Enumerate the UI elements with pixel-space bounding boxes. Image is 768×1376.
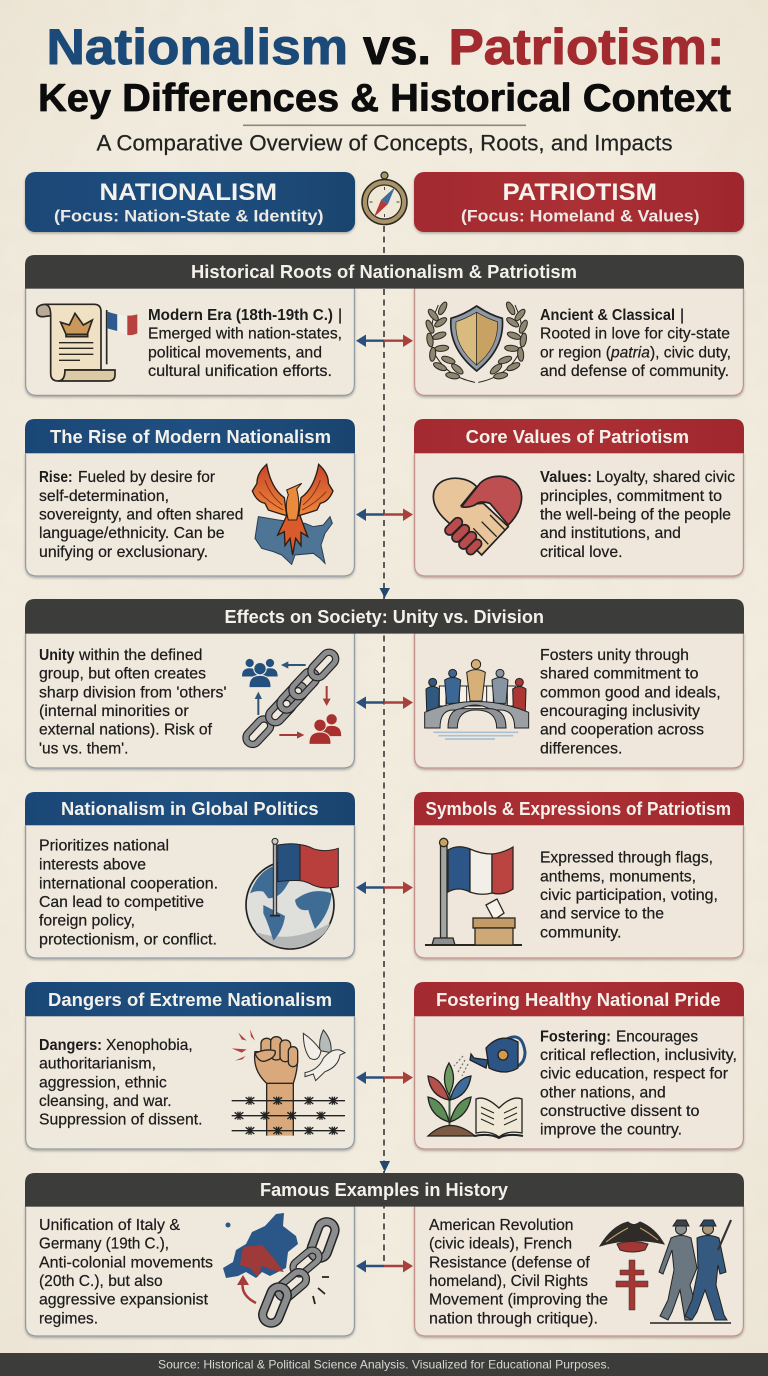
text: fosters unity: common good and ideals, (540, 684, 721, 701)
icon: scroll and flag (37, 304, 137, 381)
icon: handshake heart (433, 476, 522, 556)
column header: nationalism (25, 172, 355, 232)
text: unification examples: (20th C.), but also (39, 1273, 163, 1290)
icon: people on bridge (425, 660, 529, 739)
icon: globe and flag (246, 838, 338, 949)
banner: historical roots (25, 255, 744, 289)
text: ancient and classical: Ancient & Classical (540, 307, 675, 324)
text: modern era: political movements, and (148, 344, 322, 361)
arrow: rise vs values comparison (356, 508, 413, 521)
column header: nationalism: (Focus: Nation-State & Identity) (54, 206, 324, 226)
panel: symbols and expressions (414, 792, 744, 958)
heading: dangers: Dangers of Extreme Nationalism (48, 990, 332, 1010)
text: fostering: critical reflection, inclusivity, (540, 1047, 737, 1064)
text: rise: unifying or exclusionary. (39, 544, 208, 561)
banner: famous examples (25, 1173, 744, 1207)
column header: patriotism: (Focus: Homeland & Values) (461, 206, 700, 226)
icon: europe map and broken chain (223, 1213, 337, 1326)
text: unity: external nations). Risk of (39, 722, 213, 739)
arrow: down to famous examples (380, 1161, 390, 1172)
text: revolution examples: nation through critique). (429, 1310, 598, 1327)
text: fosters unity: shared commitment to (540, 666, 699, 683)
footer: Source: Historical & Political Science Analysis. Visualized for Educational Purposes. (158, 1358, 610, 1372)
text: values: the well-being of the people (540, 506, 731, 524)
panel: nationalism in global politics (25, 792, 355, 958)
section 3: effects on society (25, 599, 744, 768)
text: rise: Rise: (39, 469, 72, 486)
icon: chain and opposing groups (242, 649, 342, 747)
text: symbols: community. (540, 924, 622, 941)
text: values: Loyalty, shared civic (596, 469, 735, 486)
arrow: examples comparison (356, 1260, 413, 1272)
panel: modern era (26, 288, 354, 395)
title: Nationalism (46, 19, 348, 75)
heading: rise of modern nationalism (25, 419, 355, 453)
text: revolution examples: Resistance (defense of (429, 1254, 590, 1271)
heading: fostering (414, 982, 744, 1016)
icon: shield and laurel (424, 301, 529, 382)
icon: tricorn hat, cross of Lorraine and soldiers (600, 1220, 731, 1323)
arrow: dangers vs fostering comparison (356, 1072, 413, 1084)
icon: phoenix over map (252, 464, 333, 564)
footer (0, 1353, 768, 1376)
text: unification examples: Unification of Italy & (39, 1217, 180, 1234)
text: revolution examples: (civic ideals), French (429, 1236, 572, 1253)
text: dangers: Xenophobia, (106, 1037, 193, 1054)
text: dangers: Suppression of dissent. (39, 1112, 202, 1129)
heading: core values: Core Values of Patriotism (466, 427, 689, 447)
text: rise: sovereignty, and often shared (39, 506, 244, 524)
arrow: down to effects (380, 588, 390, 598)
column header: patriotism (414, 172, 744, 232)
banner: historical roots: Historical Roots of Nationalism & Patriotism (191, 262, 577, 282)
text: ancient and classical: and defense of community. (540, 363, 729, 380)
text: symbols (540, 850, 718, 941)
text: fostering: Fostering: (540, 1028, 611, 1045)
text: unification examples (39, 1217, 213, 1327)
icon: compass (362, 172, 407, 224)
heading: fostering: Fostering Healthy National Pride (436, 990, 721, 1010)
text: ancient and classical (540, 307, 731, 380)
arrow: effects comparison (356, 696, 413, 709)
text: unity: Unity (39, 647, 75, 664)
text: symbols: anthems, monuments, (540, 868, 696, 885)
text: dangers (39, 1037, 202, 1129)
heading: symbols: Symbols & Expressions of Patriotism (426, 799, 731, 819)
text: fostering: civic education, respect for (540, 1066, 729, 1083)
text: fosters unity: differences. (540, 740, 622, 757)
text: values: and institutions, and (540, 525, 681, 542)
text: revolution examples: American Revolution (429, 1217, 574, 1234)
text: revolution examples (429, 1217, 608, 1327)
text: dangers: cleansing, and war. (39, 1093, 172, 1110)
text: ancient and classical: Rooted in love for city-state (540, 326, 730, 343)
text: unification examples: regimes. (39, 1310, 98, 1327)
heading: rise of modern nationalism: The Rise of Modern Nationalism (50, 427, 331, 447)
banner: effects on society (25, 599, 744, 634)
text: values: Values: (540, 469, 592, 486)
text: revolution examples: homeland), Civil Rights (429, 1273, 588, 1290)
text: modern era: cultural unification efforts. (148, 363, 332, 380)
text: unity (39, 647, 226, 757)
text: values (540, 469, 735, 561)
text: symbols: and service to the (540, 906, 664, 923)
text: fosters unity: encouraging inclusivity (540, 703, 700, 720)
text: fostering (540, 1028, 737, 1139)
subtitle: A Comparative Overview of Concepts, Roots, and Impacts (96, 130, 672, 156)
text: fostering: other nations, and (540, 1084, 666, 1101)
panel: italy and germany (26, 1206, 354, 1336)
title: Patriotism: (448, 19, 724, 75)
text: symbols: civic participation, voting, (540, 887, 718, 904)
panel: american revolution (415, 1206, 743, 1336)
text: global politics: international cooperation. (39, 875, 218, 892)
icon: watering can, plant and book (428, 1037, 525, 1138)
text: revolution examples: Movement (improving the (429, 1292, 608, 1309)
text: rise: language/ethnicity. Can be (39, 525, 225, 542)
text: modern era (148, 307, 342, 380)
text: fostering: improve the country. (540, 1122, 682, 1139)
panel: ancient and classical (415, 288, 743, 395)
text: unity: (internal minorities or (39, 703, 189, 720)
text: unification examples: Anti-colonial movements (39, 1254, 213, 1271)
title (38, 19, 731, 120)
icon: flag and ballot box (425, 838, 522, 945)
text: fosters unity: Fosters unity through (540, 647, 689, 664)
column header: nationalism: NATIONALISM (100, 179, 277, 206)
arrow: roots comparison (356, 334, 413, 347)
text: fostering: constructive dissent to (540, 1103, 700, 1120)
text: global politics: Can lead to competitive (39, 894, 204, 911)
text: unity: 'us vs. them'. (39, 740, 128, 757)
banner: effects on society: Effects on Society: Unity vs. Division (224, 607, 544, 627)
text: modern era: Emerged with nation-states, (148, 326, 342, 343)
heading: symbols (414, 792, 744, 825)
title: Key Differences & Historical Context (38, 77, 731, 120)
heading: global politics: Nationalism in Global Politics (61, 799, 319, 819)
text: dangers: Dangers: (39, 1037, 102, 1054)
panel: unity and division (26, 633, 354, 768)
text: unity: group, but often creates (39, 666, 206, 683)
panel: dangers of extreme nationalism (25, 982, 355, 1149)
text: global politics: Prioritizes national (39, 838, 169, 855)
text: modern era: Modern Era (18th-19th C.) (148, 307, 333, 324)
panel: rise of modern nationalism (25, 419, 355, 576)
section 6: famous examples (25, 1173, 744, 1336)
text: fosters unity (540, 647, 721, 757)
text: global politics: interests above (39, 856, 146, 873)
text: global politics (39, 838, 218, 948)
title: vs. (363, 19, 431, 75)
text: ancient and classical: | (680, 307, 684, 324)
panel: fostering healthy national pride (414, 982, 744, 1149)
panel: core values of patriotism (414, 419, 744, 576)
text: modern era: | (338, 307, 342, 324)
text: ancient and classical: or region (patria), civic duty, (540, 344, 731, 361)
text: global politics: foreign policy, (39, 913, 135, 930)
banner: famous examples: Famous Examples in History (260, 1180, 508, 1200)
heading: core values (414, 419, 744, 453)
heading: dangers (25, 982, 355, 1016)
text: unity: within the defined (78, 647, 202, 664)
panel: fosters unity (415, 633, 743, 768)
text: unification examples: aggressive expansionist (39, 1292, 209, 1309)
icon: fist, dove and barbed wire (232, 1029, 345, 1136)
column header: patriotism: PATRIOTISM (502, 179, 657, 206)
text: fostering: Encourages (616, 1028, 698, 1045)
text: fosters unity: and cooperation across (540, 722, 704, 739)
text: unity: sharp division from 'others' (39, 684, 226, 701)
text: rise: Fueled by desire for (78, 469, 216, 486)
text: dangers: aggression, ethnic (39, 1074, 167, 1091)
section 1: historical roots (25, 255, 744, 395)
text: global politics: protectionism, or conflict. (39, 931, 217, 948)
text: rise (39, 469, 244, 561)
text: unification examples: Germany (19th C.), (39, 1236, 169, 1253)
arrow: politics vs symbols comparison (356, 882, 413, 894)
text: values: principles, commitment to (540, 488, 722, 505)
text: rise: self-determination, (39, 488, 169, 505)
text: symbols: Expressed through flags, (540, 850, 713, 867)
central dashed timeline (383, 226, 385, 1266)
text: dangers: authoritarianism, (39, 1056, 156, 1073)
heading: global politics (25, 792, 355, 825)
text: values: critical love. (540, 544, 622, 561)
